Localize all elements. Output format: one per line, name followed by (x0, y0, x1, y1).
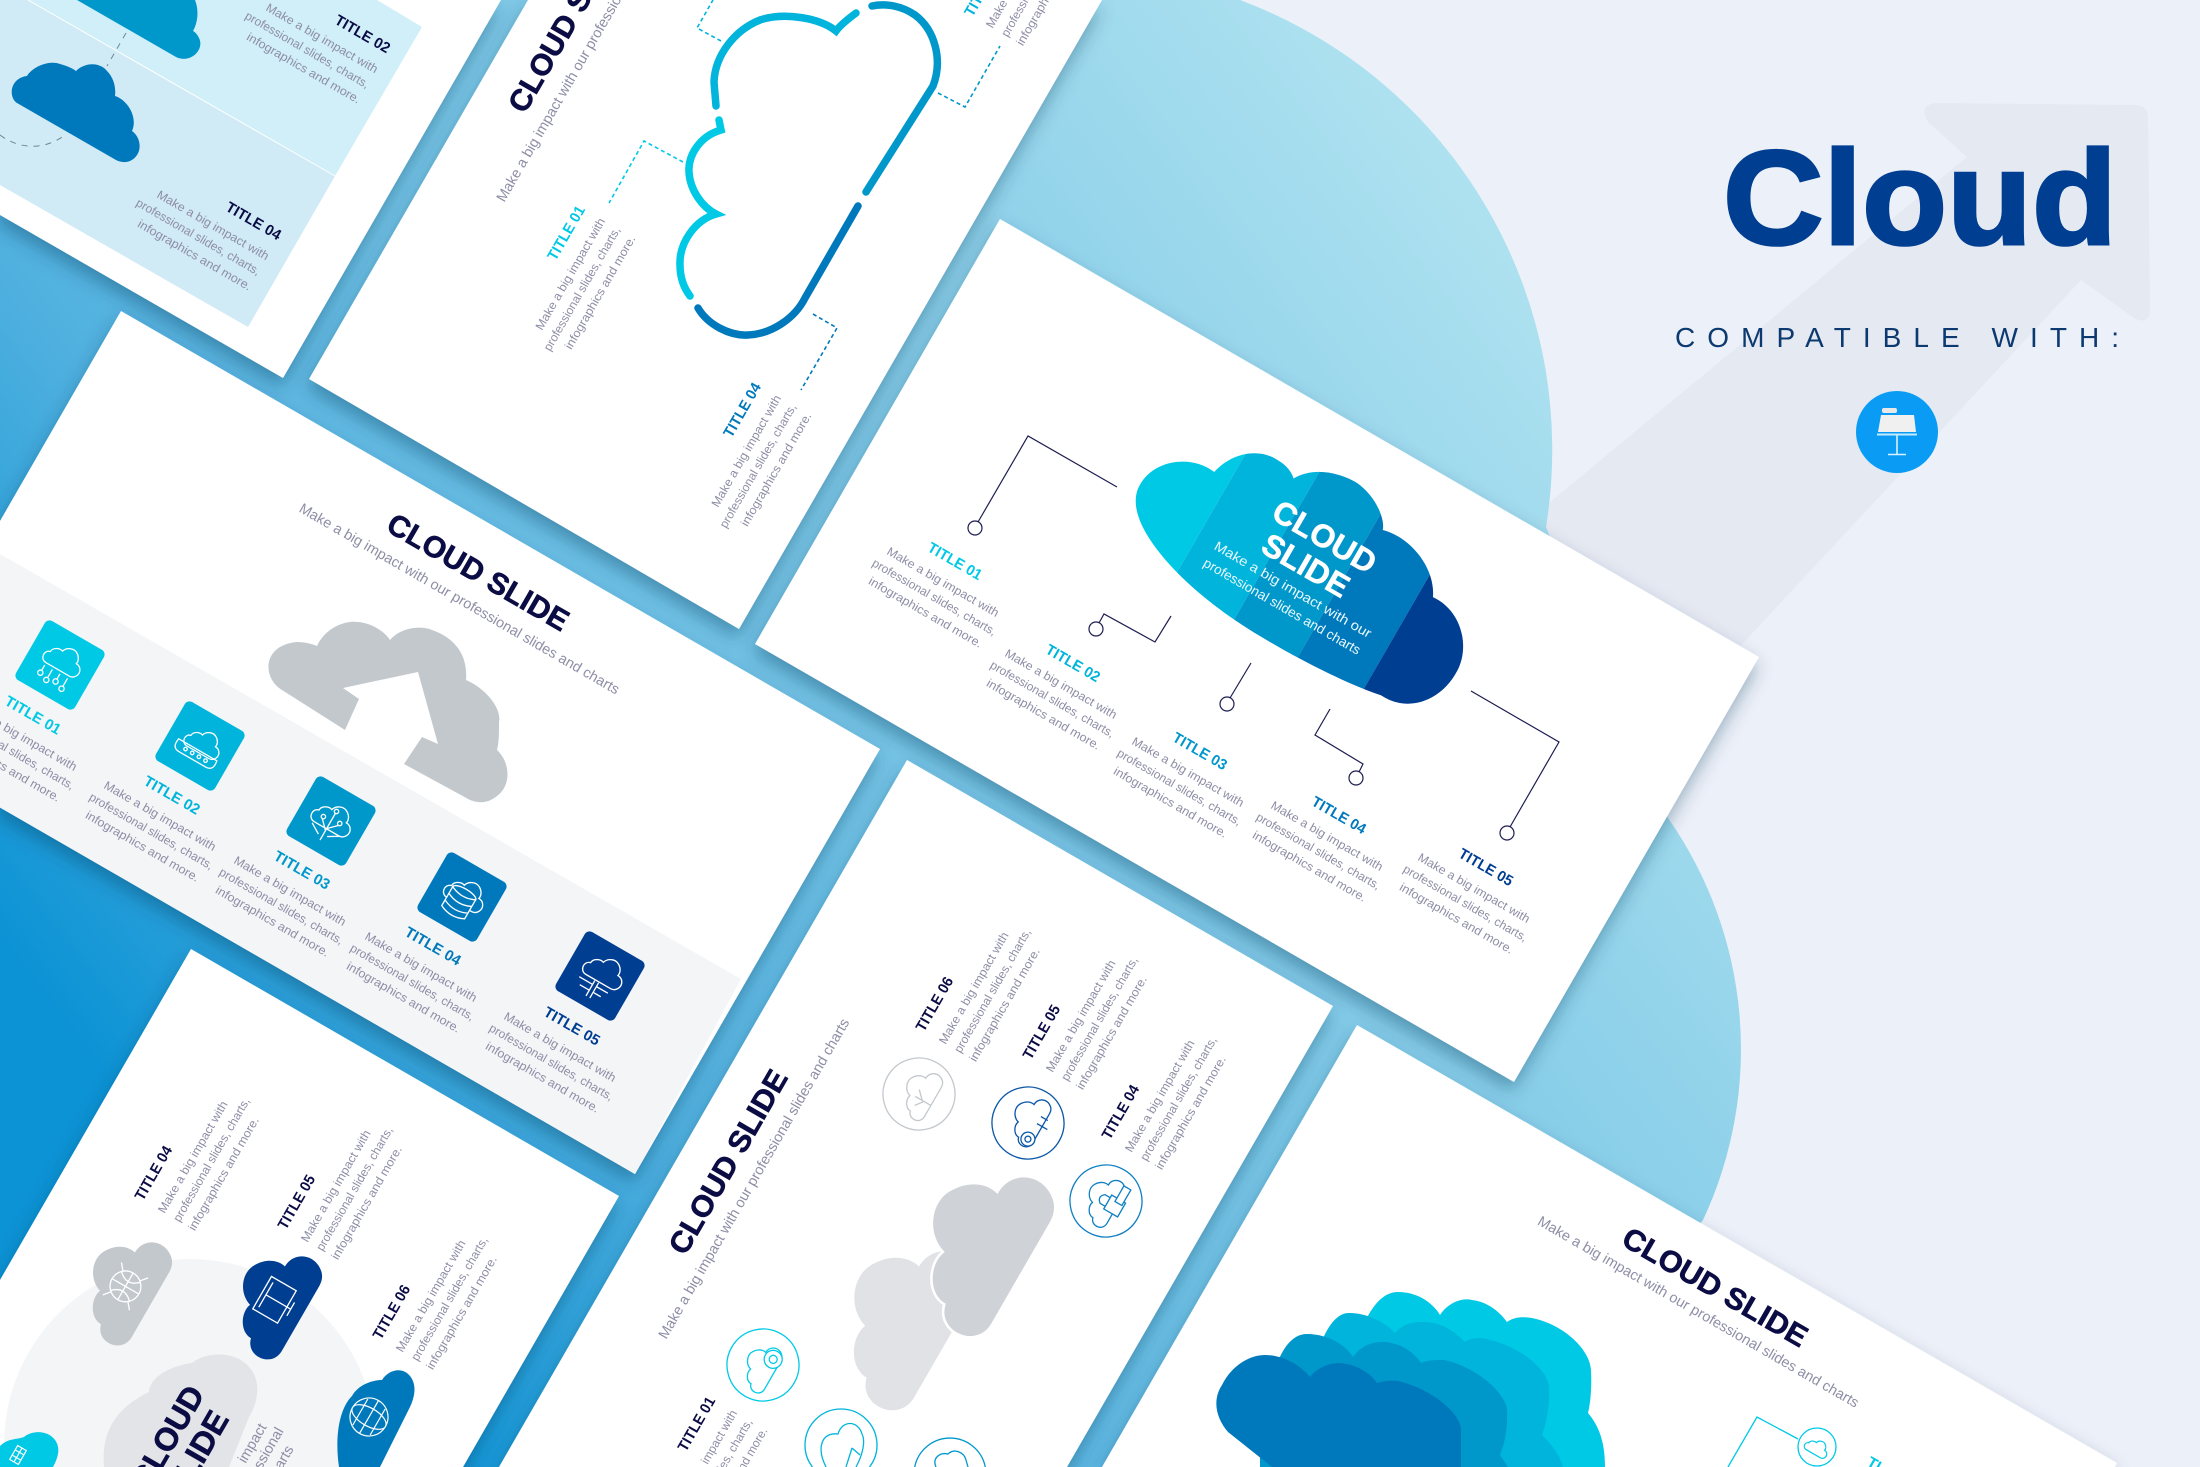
cloud: front (885, 1142, 1066, 1347)
icon: square 2 (153, 699, 247, 793)
text: title 04: infographics and more. (344, 959, 463, 1036)
text: title 02 (78, 753, 237, 888)
text: title 01: TITLE 01 (544, 203, 589, 263)
text: title 04: infographics and more. (1250, 828, 1369, 905)
text: title 04: infographics and more. (738, 410, 814, 529)
text: title 04 (1099, 1012, 1235, 1172)
text: title 04: Make a big impact with (155, 187, 272, 263)
subheading: Make a big impact with our professional slides and charts (296, 501, 622, 698)
text: title 01: TITLE 01 (925, 539, 985, 584)
cloud upper (77, 0, 200, 59)
icon: leader and circle (1728, 1417, 1836, 1467)
text: title 04: infographics and more. (185, 1114, 262, 1233)
panel: bottom centre slide (499, 760, 1333, 1467)
text: title 02 (234, 0, 393, 106)
text: title 04: professional slides, charts, (717, 401, 799, 530)
centre text: impact (235, 1421, 270, 1466)
text: title 05: infographics and more. (328, 1143, 405, 1262)
icon: circle 5 (979, 1074, 1077, 1172)
text: title 04: professional slides, charts, (134, 196, 263, 278)
text: title 04 (680, 379, 815, 539)
text: title 05 (1020, 932, 1156, 1092)
panel: bottom left slide (0, 949, 619, 1467)
text: title 04: professional slides, charts, (170, 1095, 253, 1224)
icon: circle 2 (805, 1409, 877, 1467)
text: title 04: Make a big impact with (708, 392, 784, 509)
text: title 01: TITLE 01 (2, 693, 64, 739)
cloud: gray with globe (63, 1220, 179, 1352)
text: title 03: professional slides, charts, (217, 865, 346, 947)
text: title 03: professional slides, charts, (1115, 746, 1244, 828)
text: title 02: Make a big impact with (264, 0, 380, 76)
text: title 04: professional slides, charts, (1137, 1034, 1220, 1163)
text: title 01: TITLE 01 (675, 1394, 719, 1454)
text: title 06: infographics and more. (423, 1253, 500, 1372)
text: title 01: infographics and more. (562, 233, 638, 352)
text: title 01: infographics and more. (866, 574, 985, 651)
text: title 06: TITLE 06 (370, 1282, 414, 1342)
text: title 05: infographics and more. (483, 1039, 602, 1116)
text: title 02 (979, 621, 1138, 756)
cloud: blue with globe (337, 1370, 414, 1467)
text: title 05: professional slides, charts, (313, 1124, 396, 1253)
text: title 06: TITLE 06 (913, 974, 957, 1034)
title: Cloud (1723, 124, 2117, 273)
icon: square 1 (13, 618, 107, 712)
text: title 04: infographics and more. (1152, 1053, 1229, 1172)
text: title 03: infographics and more. (213, 883, 332, 960)
text: title 06 (913, 904, 1049, 1064)
cloud lower (12, 63, 140, 162)
text: title 05 (478, 984, 637, 1119)
icon: square 3 (284, 774, 378, 868)
text: title 06: professional slides, charts, (408, 1234, 491, 1363)
text: title 06: professional slides, charts, (951, 926, 1034, 1055)
text: title 05 (1392, 825, 1551, 960)
text: title 04: TITLE 04 (720, 379, 765, 440)
light band lower (0, 0, 335, 327)
large blue cloud background (0, 0, 1741, 1467)
text: title 04: TITLE 04 (132, 1142, 177, 1204)
text: title 01: professional slides, charts, (870, 556, 999, 638)
cloud outline, segmented (680, 5, 937, 335)
text: title 05: Make a big impact with (1416, 850, 1532, 926)
icon: square 5 (553, 929, 647, 1023)
text: title 01: Make a big impact with (532, 216, 608, 332)
heading: CLOUD SLIDE (663, 1064, 795, 1260)
text: title 04: professional slides, charts, (348, 941, 477, 1023)
cloud with five colour stripes: professional slides and charts (1201, 555, 1364, 658)
panel: bottom right slide (1102, 1025, 2117, 1467)
text: title 03: TITLE 03 (271, 848, 333, 894)
gray circle (4, 1259, 376, 1467)
text: title 05: TITLE 05 (275, 1172, 319, 1232)
connectors (968, 436, 1559, 840)
background arrow (1480, 103, 2150, 840)
text: title 05 (275, 1102, 411, 1262)
cloud heading: CLOUD (1266, 493, 1383, 581)
text: title 04: professional slides, charts, (1254, 810, 1383, 892)
cloud: cyan (0, 1432, 58, 1467)
panel: left slide with icon band (0, 311, 880, 1174)
text: title 04: TITLE 04 (402, 924, 464, 970)
text: title 04: TITLE 04 (1099, 1081, 1144, 1142)
text: title 05: TITLE 05 (1020, 1002, 1064, 1062)
cloud subheading: Make a big impact with our (1212, 538, 1375, 641)
text: title 01: impact with (698, 1408, 740, 1466)
text: title 05: infographics and more. (1397, 880, 1516, 957)
dashed leaders (609, 0, 1000, 390)
cloud: navy with screen (213, 1234, 329, 1366)
text: title 05: Make a big impact with (502, 1009, 618, 1085)
text: title 02: Make a big impact with (1003, 646, 1119, 722)
icon: circle 1 (714, 1316, 812, 1414)
text: title 05: infographics and more. (1073, 973, 1150, 1092)
text: title 04: Make a big impact with (363, 929, 479, 1005)
text: title 05: TITLE 05 (1456, 845, 1516, 890)
text: title 02: TITLE 02 (1043, 641, 1103, 686)
text: title 01 (0, 673, 98, 808)
icon: square 4 (415, 850, 509, 944)
text: title 03: infographics and more. (1111, 764, 1230, 841)
icon: circle 4 (1057, 1152, 1155, 1250)
icon: circle 3 (915, 1438, 985, 1467)
text: title 05: professional slides, charts, (1058, 954, 1141, 1083)
light band upper (28, 0, 422, 176)
text: title 03: Make a big impact with (1130, 734, 1246, 810)
text: title 05: professional slides, charts, (487, 1021, 616, 1103)
icon: circle 6 (870, 1045, 968, 1143)
subheading: Make a big impact with our professional slides and charts (1535, 1214, 1861, 1411)
text: title 06 (370, 1212, 506, 1372)
text: title 05: professional slides, charts, (1401, 862, 1530, 944)
text: title 04 (125, 159, 285, 294)
layered cloud (1216, 1292, 1605, 1467)
text: title 01 (504, 203, 638, 362)
text: title 02 (961, 0, 1096, 48)
gray band (0, 554, 741, 1174)
text: title 06: Make a big impact with (936, 930, 1012, 1046)
text: title 04: Make a big impact with (1122, 1038, 1198, 1154)
text: title 01 (861, 519, 1020, 654)
text: title 03: TITLE 03 (1170, 729, 1230, 774)
cloud: back (808, 1217, 987, 1420)
text: title 06: infographics and more. (966, 945, 1043, 1064)
text: title 03 (1106, 709, 1265, 844)
text: title 05: Make a big impact with (1043, 958, 1119, 1074)
cloud with five colour stripes: SLIDE (1256, 526, 1356, 605)
text: title 02: professional slides, charts, (243, 9, 372, 91)
panel: top center slide (309, 0, 1102, 629)
text: title 02: professional slides, charts, (988, 658, 1117, 740)
text: title 01: professional slides, charts, (541, 224, 623, 353)
text: title 05: Make a big impact with (298, 1128, 374, 1244)
text: title 02: infographics and more. (244, 30, 363, 106)
cloud: centre (104, 1354, 257, 1467)
text: title 02: Make a big impact with (102, 778, 218, 854)
text: title 03: Make a big impact with (232, 853, 348, 929)
text: title 04: Make a big impact with (1269, 798, 1385, 874)
text: title 06: Make a big impact with (393, 1238, 469, 1354)
panel: top left slide (0, 0, 501, 378)
text: title 04: TITLE 04 (223, 199, 285, 244)
text: title 04 (1245, 773, 1404, 908)
text: title 04: infographics and more. (135, 217, 254, 293)
subtitle: compatible with: COMPATIBLE WITH: (1675, 322, 2119, 353)
subheading: Make a big impact with our professional slides and charts (656, 1016, 853, 1342)
text: title 01 (674, 1394, 770, 1467)
text: title 04: Make a big impact with (155, 1099, 231, 1216)
text: title 03 (208, 828, 367, 963)
text: title 02: TITLE 02 (141, 773, 203, 819)
panel: main cloud slide (755, 219, 1759, 1082)
text: title 02: professional slides, charts, (87, 790, 216, 872)
text: title 04: TITLE 04 (1309, 793, 1370, 838)
text: title 05: TITLE 05 (541, 1004, 603, 1050)
cloud with five colour stripes (1136, 453, 1464, 704)
text: title 02: infographics and more. (83, 808, 202, 885)
icon: keynote (1856, 391, 1938, 473)
centre text (235, 1421, 297, 1467)
heading: CLOUD SLIDE (381, 507, 574, 638)
text: title 04 (132, 1073, 268, 1233)
heading: CLOUD SLIDE (1616, 1221, 1813, 1354)
text: title 04 (339, 904, 498, 1039)
text: title 01: Make a big impact with (885, 544, 1001, 620)
cloud with upload arrow (268, 622, 508, 802)
text: title 02: infographics and more. (984, 676, 1103, 753)
text: title 02: TITLE 02 (332, 12, 393, 57)
